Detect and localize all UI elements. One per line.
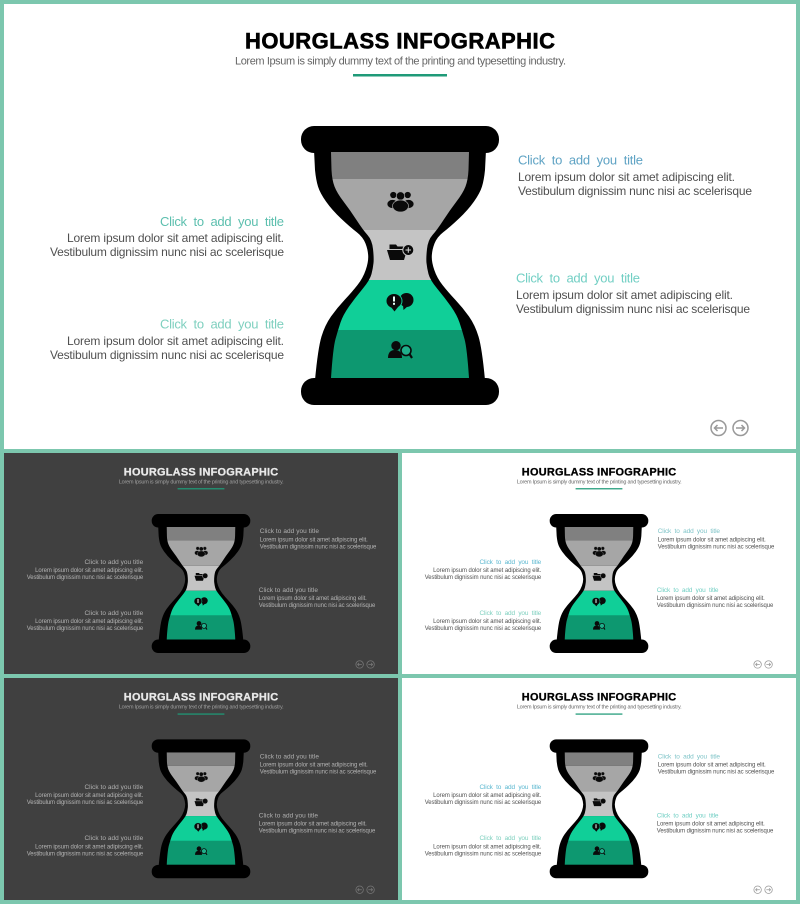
- hourglass: [152, 739, 250, 878]
- text blocks: Click to add you title: [657, 587, 719, 594]
- text blocks: Vestibulum dignissim nunc nisi ac scelerisque: [657, 828, 774, 834]
- icon: nav arrows: [356, 886, 374, 893]
- panel: dark slide bottom left: [4, 678, 398, 900]
- text blocks: Vestibulum dignissim nunc nisi ac scelerisque: [27, 575, 144, 581]
- text block: right upper: Lorem ipsum dolor sit amet adipiscing elit.: [518, 170, 735, 184]
- subtitle: Lorem Ipsum is simply dummy text of the printing and typesetting industry.: [517, 705, 682, 711]
- text blocks: Click to add you title: [260, 754, 319, 761]
- text blocks: Lorem ipsum dolor sit amet adipiscing elit.: [658, 763, 766, 769]
- text blocks: Vestibulum dignissim nunc nisi ac scelerisque: [425, 800, 542, 806]
- icon: nav arrows: [754, 886, 772, 893]
- text block: right lower: Vestibulum dignissim nunc nisi ac scelerisque: [516, 302, 750, 316]
- hourglass: [301, 126, 499, 405]
- text blocks: Lorem ipsum dolor sit amet adipiscing elit.: [433, 793, 542, 799]
- text blocks: Click to add you title: [259, 812, 318, 819]
- text blocks: Vestibulum dignissim nunc nisi ac scelerisque: [259, 603, 376, 609]
- title underline: [353, 74, 447, 76]
- text blocks: Click to add you title: [259, 587, 318, 594]
- text block: left upper: Lorem ipsum dolor sit amet adipiscing elit.: [67, 231, 284, 245]
- subtitle: Lorem Ipsum is simply dummy text of the printing and typesetting industry.: [119, 479, 284, 485]
- text blocks: Lorem ipsum dolor sit amet adipiscing elit.: [260, 763, 368, 769]
- text blocks: [27, 754, 377, 857]
- icon: nav arrows: [356, 661, 374, 668]
- hourglass: [152, 514, 250, 653]
- text block: left lower: [50, 316, 284, 362]
- subtitle: Lorem Ipsum is simply dummy text of the printing and typesetting industry.: [517, 479, 682, 485]
- hourglass: [550, 514, 648, 653]
- text blocks: Lorem ipsum dolor sit amet adipiscing elit.: [658, 537, 766, 543]
- text blocks: Lorem ipsum dolor sit amet adipiscing elit.: [433, 568, 542, 574]
- text blocks: Lorem ipsum dolor sit amet adipiscing elit.: [35, 844, 144, 850]
- text blocks: Click to add you title: [84, 835, 144, 842]
- text blocks: Click to add you title: [84, 784, 144, 791]
- icon: folder: [387, 244, 414, 260]
- text blocks: Lorem ipsum dolor sit amet adipiscing elit.: [433, 844, 542, 850]
- text blocks: Vestibulum dignissim nunc nisi ac scelerisque: [260, 770, 377, 776]
- text blocks: Lorem ipsum dolor sit amet adipiscing elit.: [259, 822, 367, 828]
- text blocks: [27, 528, 377, 632]
- text block: left upper: Click to add you title: [160, 214, 284, 229]
- subtitle: Lorem Ipsum is simply dummy text of the printing and typesetting industry.: [235, 56, 566, 68]
- text block: left lower: Vestibulum dignissim nunc nisi ac scelerisque: [50, 348, 284, 362]
- text blocks: Vestibulum dignissim nunc nisi ac scelerisque: [27, 851, 144, 857]
- text blocks: Vestibulum dignissim nunc nisi ac scelerisque: [658, 770, 775, 776]
- text block: right upper: Vestibulum dignissim nunc nisi ac scelerisque: [518, 184, 752, 198]
- title: HOURGLASS INFOGRAPHIC: [522, 466, 676, 478]
- text block: left lower: Click to add you title: [160, 316, 284, 332]
- text blocks: Click to add you title: [84, 610, 144, 617]
- text block: right upper: Click to add you title: [518, 152, 643, 168]
- text blocks: Click to add you title: [658, 528, 720, 535]
- text block: left lower: Lorem ipsum dolor sit amet adipiscing elit.: [67, 334, 284, 348]
- text block: right lower: Lorem ipsum dolor sit amet adipiscing elit.: [516, 288, 733, 302]
- icon: speech bubbles: [386, 293, 414, 312]
- text blocks: Click to add you title: [657, 812, 719, 819]
- title: HOURGLASS INFOGRAPHIC: [124, 692, 278, 704]
- title: HOURGLASS INFOGRAPHIC: [124, 466, 278, 478]
- text blocks: Click to add you title: [260, 528, 319, 535]
- title: HOURGLASS INFOGRAPHIC: [245, 28, 555, 54]
- text blocks: Vestibulum dignissim nunc nisi ac scelerisque: [260, 544, 377, 550]
- text blocks: Vestibulum dignissim nunc nisi ac scelerisque: [425, 575, 542, 581]
- icon: people: [387, 192, 414, 212]
- text blocks: Lorem ipsum dolor sit amet adipiscing elit.: [35, 568, 144, 574]
- text blocks: Vestibulum dignissim nunc nisi ac scelerisque: [657, 603, 774, 609]
- text blocks: Lorem ipsum dolor sit amet adipiscing elit.: [35, 619, 144, 625]
- panel: dark slide top left: [4, 453, 398, 674]
- text blocks: Lorem ipsum dolor sit amet adipiscing elit.: [657, 822, 765, 828]
- text block: left upper: Vestibulum dignissim nunc nisi ac scelerisque: [50, 245, 284, 259]
- icon: previous and next arrows: [711, 420, 748, 436]
- hourglass: [550, 739, 648, 878]
- text blocks: Vestibulum dignissim nunc nisi ac scelerisque: [425, 626, 542, 632]
- text blocks: Click to add you title: [479, 784, 542, 791]
- text blocks: Lorem ipsum dolor sit amet adipiscing elit.: [35, 793, 144, 799]
- text blocks: Click to add you title: [479, 835, 542, 842]
- text blocks: Vestibulum dignissim nunc nisi ac scelerisque: [27, 800, 144, 806]
- text blocks: [425, 754, 775, 857]
- text blocks: Lorem ipsum dolor sit amet adipiscing elit.: [657, 596, 765, 602]
- icon: person search: [388, 341, 412, 358]
- panel: main white slide: [4, 4, 796, 449]
- text blocks: Click to add you title: [479, 559, 542, 566]
- title: HOURGLASS INFOGRAPHIC: [522, 692, 676, 704]
- text blocks: Lorem ipsum dolor sit amet adipiscing elit.: [433, 619, 542, 625]
- text blocks: Lorem ipsum dolor sit amet adipiscing elit.: [259, 596, 367, 602]
- text blocks: Click to add you title: [84, 559, 144, 566]
- text block: right lower: [516, 270, 750, 316]
- subtitle: Lorem Ipsum is simply dummy text of the printing and typesetting industry.: [119, 705, 284, 711]
- text blocks: Click to add you title: [479, 610, 542, 617]
- text block: right lower: Click to add you title: [516, 270, 640, 286]
- text blocks: Vestibulum dignissim nunc nisi ac scelerisque: [27, 626, 144, 632]
- text blocks: [425, 528, 775, 632]
- text blocks: Lorem ipsum dolor sit amet adipiscing elit.: [260, 537, 368, 543]
- text blocks: Vestibulum dignissim nunc nisi ac scelerisque: [658, 544, 775, 550]
- text block: left upper: [50, 214, 284, 259]
- text blocks: Vestibulum dignissim nunc nisi ac scelerisque: [425, 851, 542, 857]
- text block: right upper: [518, 152, 752, 198]
- panel: white slide top right: [402, 453, 796, 674]
- text blocks: Vestibulum dignissim nunc nisi ac scelerisque: [259, 828, 376, 834]
- text blocks: Click to add you title: [658, 754, 720, 761]
- panel: white slide bottom right: [402, 678, 796, 900]
- icon: nav arrows: [754, 661, 772, 668]
